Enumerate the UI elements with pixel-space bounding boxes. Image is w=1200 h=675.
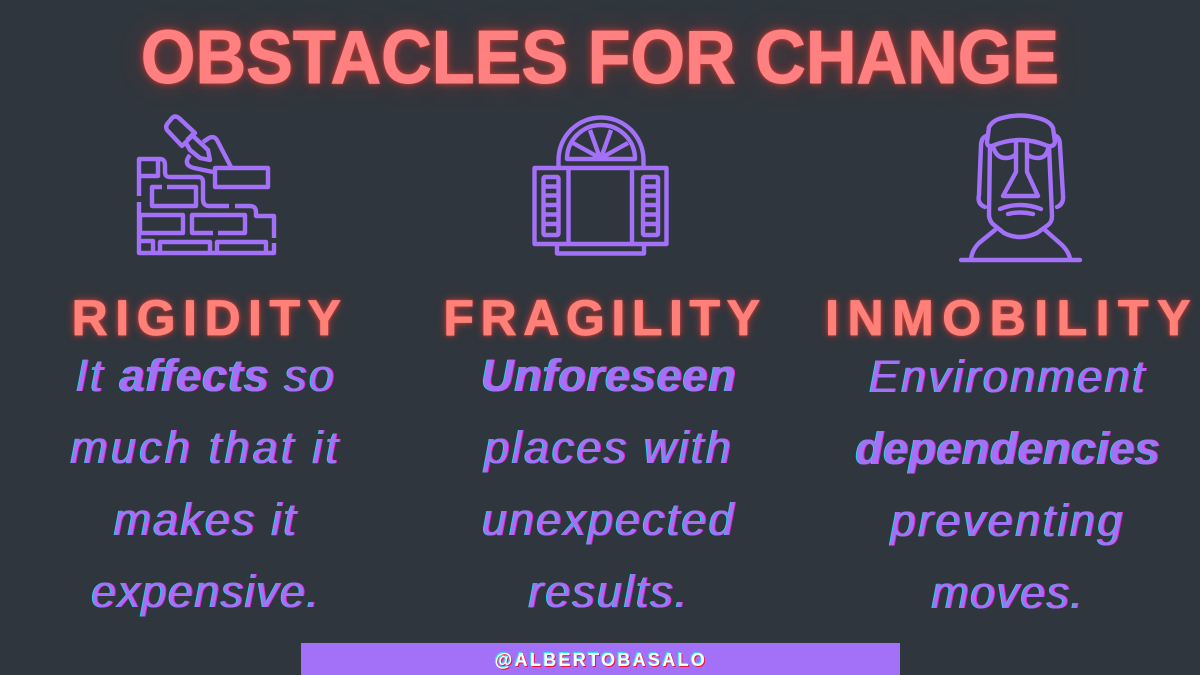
text: fragility description: Unforeseen <box>481 350 737 401</box>
text: inmobility description: preventing <box>891 495 1125 546</box>
heading: rigidity: RIGIDITY <box>72 290 348 346</box>
title: OBSTACLES FOR CHANGE <box>141 15 1059 99</box>
text: rigidity description: It affects so <box>76 350 336 401</box>
text: fragility description: places with <box>484 422 734 473</box>
text: fragility description <box>481 350 737 617</box>
icon: moai statue <box>961 116 1080 260</box>
footer handle: @ALBERTOBASALO <box>495 650 707 670</box>
text: rigidity description: much that it <box>70 422 342 473</box>
text: inmobility description: moves. <box>932 567 1084 618</box>
text: rigidity description: makes it <box>114 494 298 545</box>
heading: fragility: FRAGILITY <box>443 290 767 346</box>
text: inmobility description: Environment <box>869 351 1147 402</box>
text: inmobility description <box>856 351 1160 618</box>
text: fragility description: results. <box>528 566 690 617</box>
icon: window with shutters <box>534 118 666 254</box>
text: inmobility description: dependencies <box>856 423 1160 474</box>
text: rigidity description: expensive. <box>91 566 321 617</box>
text: fragility description: unexpected <box>482 494 736 545</box>
icon: brick wall with trowel <box>139 116 274 253</box>
footer bar <box>301 643 900 675</box>
heading: inmobility: INMOBILITY <box>825 290 1199 346</box>
text: rigidity description <box>70 350 342 617</box>
